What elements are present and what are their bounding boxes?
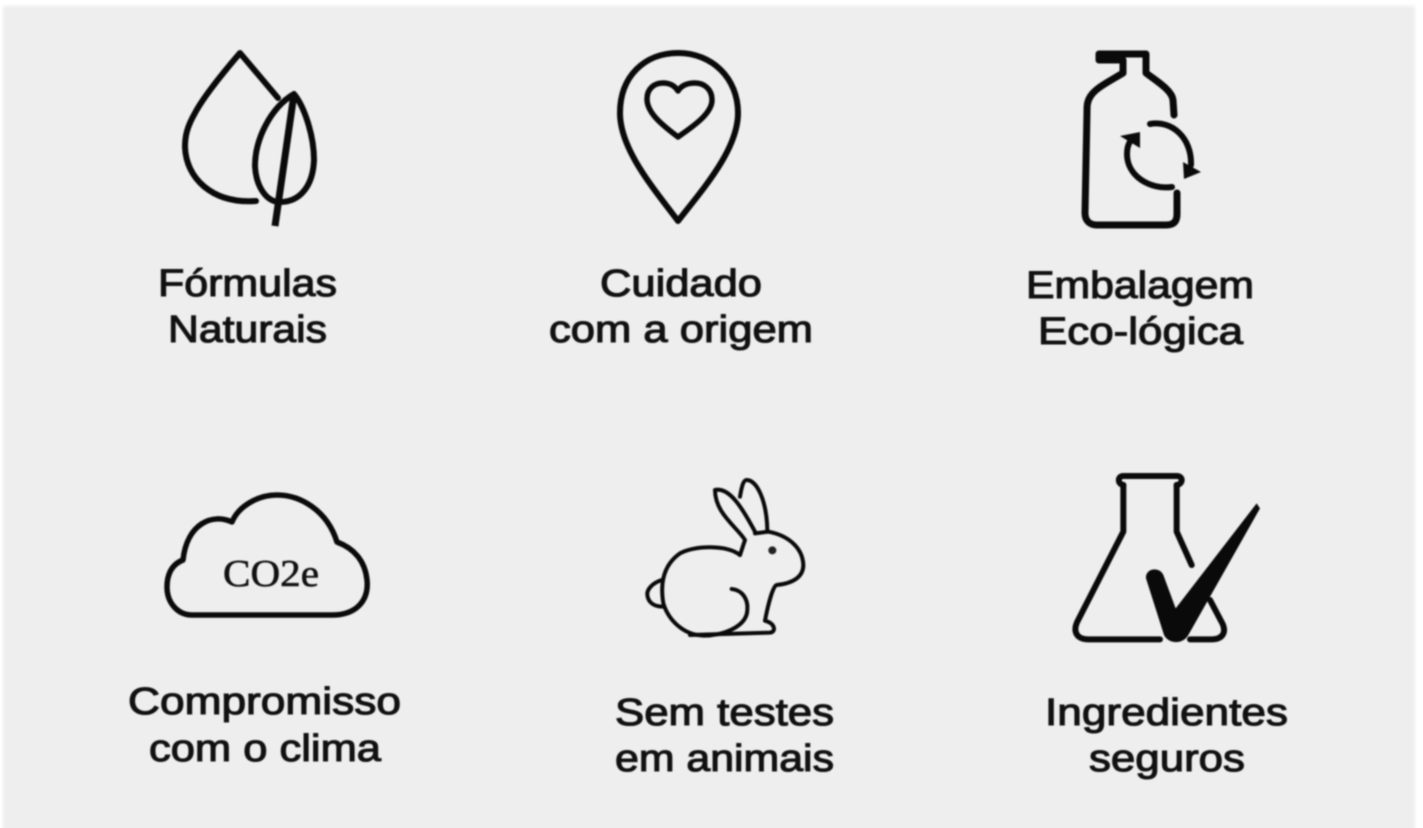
label: Ingredientes seguros [1045, 692, 1288, 780]
icon: rabbit [647, 480, 803, 636]
label: Compromisso com o clima: com o clima [149, 728, 382, 770]
label: Sem testes em animais [615, 692, 834, 780]
icon: bottle with recycling arrows [1085, 54, 1201, 225]
item: care with origin [549, 53, 813, 351]
label: Cuidado com a origem [549, 263, 813, 351]
icon: location pin with heart [620, 53, 738, 221]
label: Compromisso com o clima: Compromisso [128, 681, 401, 723]
label: Embalagem Eco-lógica: Eco-lógica [1038, 311, 1244, 353]
label: Cuidado com a origem: Cuidado [600, 263, 762, 305]
item: safe ingredients [1045, 476, 1288, 780]
label: Ingredientes seguros: Ingredientes [1045, 692, 1288, 734]
item: natural formulas [158, 53, 337, 351]
icon: water drop and leaf [185, 53, 314, 226]
label: Embalagem Eco-lógica [1026, 265, 1254, 353]
label: Embalagem Eco-lógica: Embalagem [1026, 265, 1254, 307]
label: Fórmulas Naturais: Naturais [168, 309, 327, 351]
label: Cuidado com a origem: com a origem [549, 309, 813, 351]
item: ecological packaging [1026, 54, 1254, 353]
label: Sem testes em animais: em animais [615, 738, 834, 780]
item: climate commitment [128, 495, 401, 770]
label: Compromisso com o clima [128, 681, 401, 770]
label: Ingredientes seguros: seguros [1089, 738, 1245, 780]
label: Fórmulas Naturais: Fórmulas [158, 263, 337, 305]
item: no animal testing [615, 480, 834, 780]
label: Sem testes em animais: Sem testes [615, 692, 834, 734]
icon: flask with check mark [1075, 476, 1260, 642]
icon: cloud with CO2e [167, 495, 367, 615]
text: CO2e: CO2e [223, 553, 319, 595]
label: Fórmulas Naturais [158, 263, 337, 351]
